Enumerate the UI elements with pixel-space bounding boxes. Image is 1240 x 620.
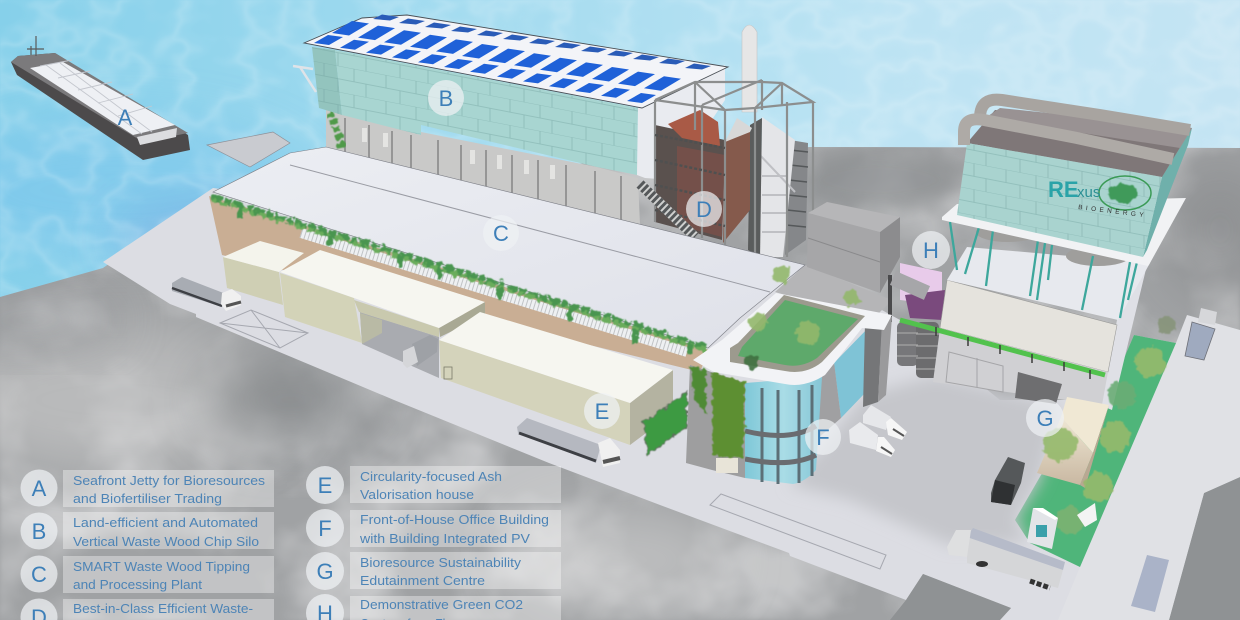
legend item G: Bioresource Sustainability: [360, 555, 522, 570]
ash house wing: left volume: [223, 241, 304, 305]
scaffold column mesh: [748, 118, 762, 257]
legend item E: Circularity-focused Ash: [360, 469, 502, 484]
roof: [304, 15, 728, 108]
marker D: [686, 191, 722, 227]
road vehicles: [1131, 308, 1217, 612]
boiler body: [655, 125, 725, 240]
west face: [312, 47, 342, 115]
solar panels upper row: [332, 21, 681, 91]
legend item A: A: [32, 476, 47, 501]
plant marker letters: [118, 80, 1064, 455]
marker G: G: [1036, 406, 1054, 431]
rear glass: [834, 325, 871, 418]
flue unit: [760, 117, 795, 257]
ash house G small block: [1037, 397, 1109, 488]
flatbed truck left: [172, 277, 241, 311]
teal columns: [950, 222, 1137, 318]
legend item H: [306, 594, 561, 620]
dark roof: [967, 110, 1192, 177]
FGT box: [807, 202, 900, 293]
scaffold top frame: [655, 80, 813, 110]
silo base bays: [326, 110, 640, 225]
cooling building G: [933, 100, 1192, 410]
road right: [1058, 315, 1240, 620]
legend item B: [20, 512, 274, 550]
courtyard: [790, 375, 1060, 545]
solar panels back row: [373, 14, 711, 70]
tanks: [976, 222, 1040, 242]
east white face: [637, 65, 725, 180]
legend item F: [306, 509, 561, 547]
legend: [20, 466, 561, 620]
stair: [640, 184, 695, 237]
legend item B: Vertical Waste Wood Chip Silo: [73, 534, 259, 549]
legend item D: [20, 598, 274, 620]
jetty: [207, 132, 290, 167]
facade: [335, 50, 638, 175]
truck in hall: [403, 335, 438, 368]
solar panels lower row: [314, 35, 656, 103]
legend item A: and Biofertiliser Trading: [73, 491, 222, 506]
marker F: F: [816, 425, 830, 450]
legend item C: and Processing Plant: [73, 577, 202, 592]
marker C: C: [493, 221, 509, 246]
green walkway: [900, 320, 1105, 379]
hopper arm: [293, 66, 316, 92]
legend item H: Demonstrative Green CO2: [360, 597, 523, 612]
dark column: [863, 323, 882, 407]
ship: barge A: [11, 36, 190, 160]
legend item A: [20, 470, 274, 507]
plant walls: [690, 366, 745, 460]
chimney: [742, 25, 757, 112]
side fin: [878, 317, 892, 402]
marker D: D: [696, 197, 712, 222]
flatbed truck front: [517, 418, 620, 467]
plant front wall: [209, 196, 709, 372]
mid column: [816, 362, 841, 440]
legend item E: Valorisation house: [360, 487, 474, 502]
roof planter: [730, 295, 865, 372]
marker H: H: [923, 238, 939, 263]
logo: BIOENERGY: [1078, 204, 1147, 219]
main plant roof C: [213, 147, 805, 348]
background: sea water: [0, 0, 1240, 320]
legend item G: G: [316, 559, 334, 584]
green strip landscape: [1015, 335, 1176, 567]
curved glass: [745, 377, 822, 484]
scaffold platforms: [655, 135, 725, 226]
white slab: [942, 198, 1186, 266]
logo: [1048, 176, 1151, 219]
marker B: [428, 80, 464, 116]
marker C: [483, 215, 519, 251]
small kiosks: [1027, 503, 1097, 549]
ash house E volume: [439, 312, 673, 445]
trees on roof: [745, 265, 860, 369]
marker F: [805, 419, 841, 455]
white deck: [693, 293, 892, 385]
legend item C: C: [31, 562, 47, 587]
legend item B: B: [32, 519, 46, 544]
green wall E: [644, 392, 687, 455]
legend item D: Best-in-Class Efficient Waste-: [73, 601, 253, 616]
pillar: [686, 365, 745, 478]
lower right side: [1100, 265, 1147, 410]
boiler frame D: [640, 25, 813, 257]
scaffold columns: [655, 80, 813, 257]
louvre strip: [301, 233, 687, 352]
platform: [947, 247, 1150, 320]
vine on silo corner: [330, 112, 343, 148]
black truck: [991, 457, 1025, 505]
legend item E: [306, 466, 561, 504]
vines along wall: [212, 197, 708, 355]
legend item F: F: [318, 516, 332, 541]
opening: [1015, 372, 1062, 404]
legend item A: Seafront Jetty for Bioresources: [73, 473, 266, 488]
marker A: A: [118, 105, 133, 130]
legend item C: [20, 556, 274, 593]
legend item F: with Building Integrated PV: [359, 531, 530, 546]
rear connecting wall: [775, 265, 892, 320]
pipes: [980, 100, 1190, 130]
grey land beside road: [1169, 477, 1240, 620]
box front: [957, 143, 1162, 257]
marker E: E: [595, 399, 609, 424]
green roof: [738, 300, 858, 366]
legend item E: E: [318, 473, 332, 498]
tipping hall middle volume: [280, 250, 485, 378]
doors: [946, 352, 1003, 392]
legend item G: Edutainment Centre: [360, 573, 485, 588]
landscape trees: [1043, 316, 1176, 534]
silo building B: [293, 14, 728, 225]
marker B: B: [439, 86, 453, 111]
legend item C: SMART Waste Wood Tipping: [73, 559, 250, 574]
lower front wall: [933, 328, 1108, 405]
loading bay markings: [220, 310, 886, 569]
marker H: [912, 231, 950, 269]
front-of-house office F: [686, 293, 892, 484]
marker E: [584, 393, 620, 429]
marker G: [1026, 399, 1064, 437]
legend item G: [306, 552, 561, 590]
container truck: [947, 528, 1065, 588]
site platform: [103, 188, 1240, 620]
right box side: [1143, 128, 1192, 257]
legend item B: Land-efficient and Automated: [73, 515, 258, 530]
back mesh: [785, 140, 808, 255]
logo: xus: [1077, 184, 1100, 201]
upper front wall: [940, 280, 1117, 372]
CO2 capture unit H: [890, 263, 945, 378]
legend item F: Front-of-House Office Building: [360, 512, 549, 527]
background: land with clouds: [0, 147, 1240, 620]
logo: RE: [1048, 177, 1079, 202]
delivery vans: [849, 405, 907, 457]
